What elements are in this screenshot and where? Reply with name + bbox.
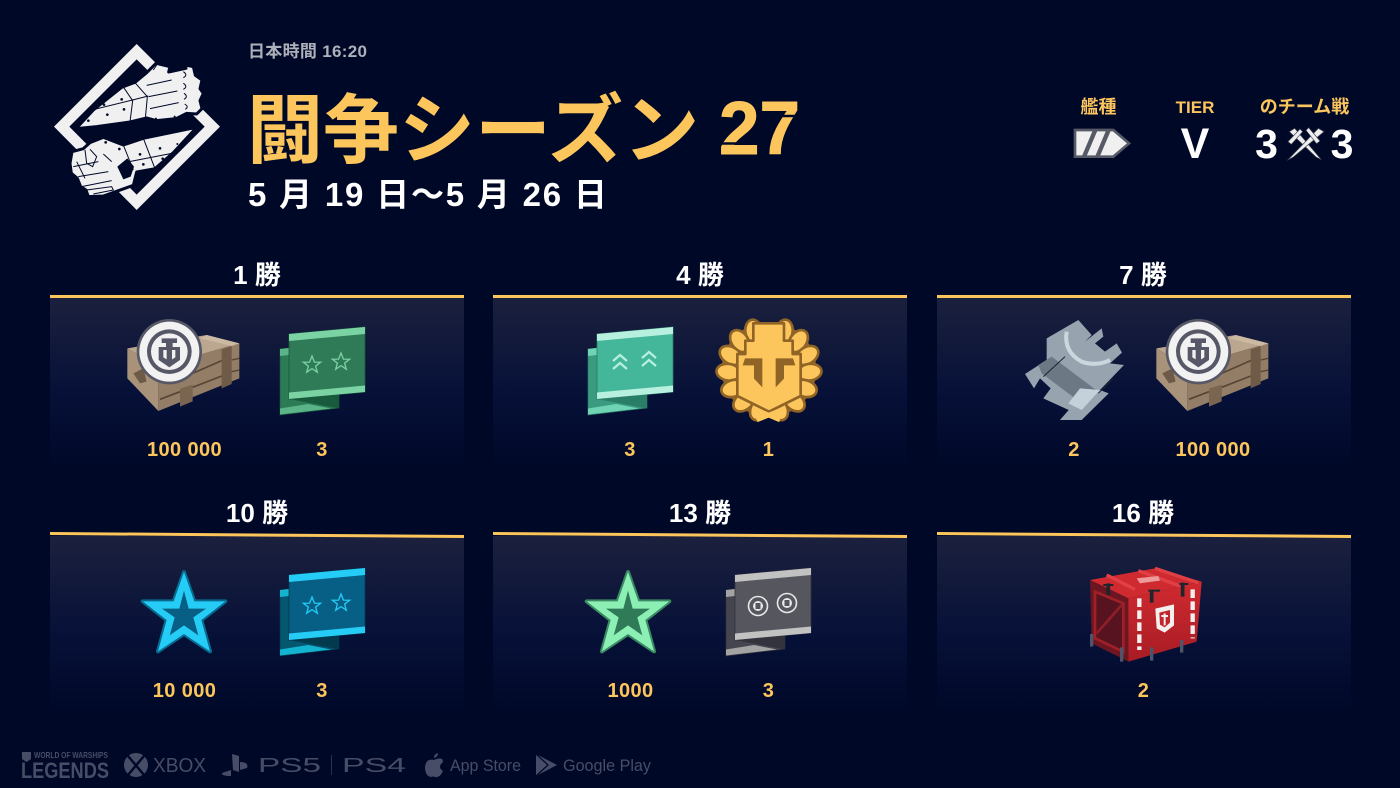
heading: 10 勝	[226, 498, 288, 528]
icon: crossed swords	[1287, 128, 1324, 160]
logo: World of Warships Legends	[21, 750, 109, 783]
heading: 4 勝	[676, 260, 724, 290]
icon: cyan star flag	[280, 568, 365, 656]
logo: App Store	[425, 753, 521, 777]
logo: World of Warships Legends: WORLD OF WARSHIPS	[34, 750, 108, 760]
upper gauntlet	[76, 63, 203, 129]
info: tier: V	[1181, 120, 1210, 168]
heading: 7 勝	[1119, 260, 1167, 290]
logo: PlayStation: PS4	[342, 755, 406, 777]
title: 闘争シーズン	[247, 69, 699, 179]
icon: grey coin flag	[726, 568, 811, 656]
panel: 7 wins	[937, 260, 1351, 470]
logo: Google Play	[536, 754, 651, 776]
info: team battle: 3	[1331, 121, 1353, 167]
icon: steel gear fragment	[1025, 320, 1124, 420]
info: team battle: 3	[1255, 121, 1278, 167]
value: 2	[1138, 680, 1149, 702]
local time: 日本時間 16:20	[248, 42, 367, 61]
heading: 1 勝	[233, 260, 281, 290]
panel: 16 wins	[937, 498, 1351, 714]
logo: PlayStation	[222, 754, 406, 777]
icon: green star flag	[280, 327, 365, 415]
logo: PlayStation: PS5	[258, 755, 321, 777]
panel: 4 wins	[493, 260, 907, 470]
icon: destroyer class	[1075, 130, 1129, 157]
platform logos	[21, 750, 651, 783]
panel: 13 wins	[493, 498, 907, 714]
value: 3	[763, 680, 774, 702]
icon: credits crate	[1156, 319, 1268, 411]
logo: App Store: App Store	[450, 756, 521, 775]
icon: credits crate	[127, 319, 239, 411]
value: 3	[316, 680, 328, 702]
emblem: crossed gauntlets in a diamond	[54, 44, 220, 210]
lower gauntlet	[70, 127, 197, 197]
logo: Xbox: XBOX	[153, 755, 206, 777]
value: 3	[624, 439, 636, 461]
value: 100 000	[1175, 439, 1251, 461]
info: tier	[1176, 98, 1214, 168]
info: ship class: 艦種	[1080, 97, 1116, 117]
value: 1	[763, 439, 774, 461]
dates: 5 月 19 日～5 月 26 日	[248, 176, 609, 213]
value: 10 000	[153, 680, 216, 702]
icon: teal chevron flag	[588, 327, 673, 415]
logo: Xbox	[124, 753, 206, 777]
info: ship class	[1075, 97, 1129, 157]
heading: 13 勝	[669, 498, 731, 528]
icon: red supply crate	[1090, 568, 1202, 662]
logo: World of Warships Legends: LEGENDS	[21, 758, 109, 783]
panel: 10 wins	[50, 498, 464, 714]
icon: gold laurel medal	[715, 318, 823, 423]
value: 1000	[607, 680, 654, 702]
logo: Google Play: Google Play	[563, 756, 651, 775]
heading: 16 勝	[1112, 498, 1174, 528]
value: 2	[1068, 439, 1080, 461]
info: tier: TIER	[1176, 98, 1214, 117]
icon: cyan star	[143, 572, 225, 651]
info: team battle: のチーム戦	[1260, 96, 1349, 117]
info: team battle	[1255, 96, 1353, 167]
value: 100 000	[147, 439, 222, 461]
season number: 27	[719, 86, 800, 170]
value: 3	[316, 439, 328, 461]
icon: green star	[587, 572, 669, 651]
panel: 1 win	[50, 260, 464, 470]
